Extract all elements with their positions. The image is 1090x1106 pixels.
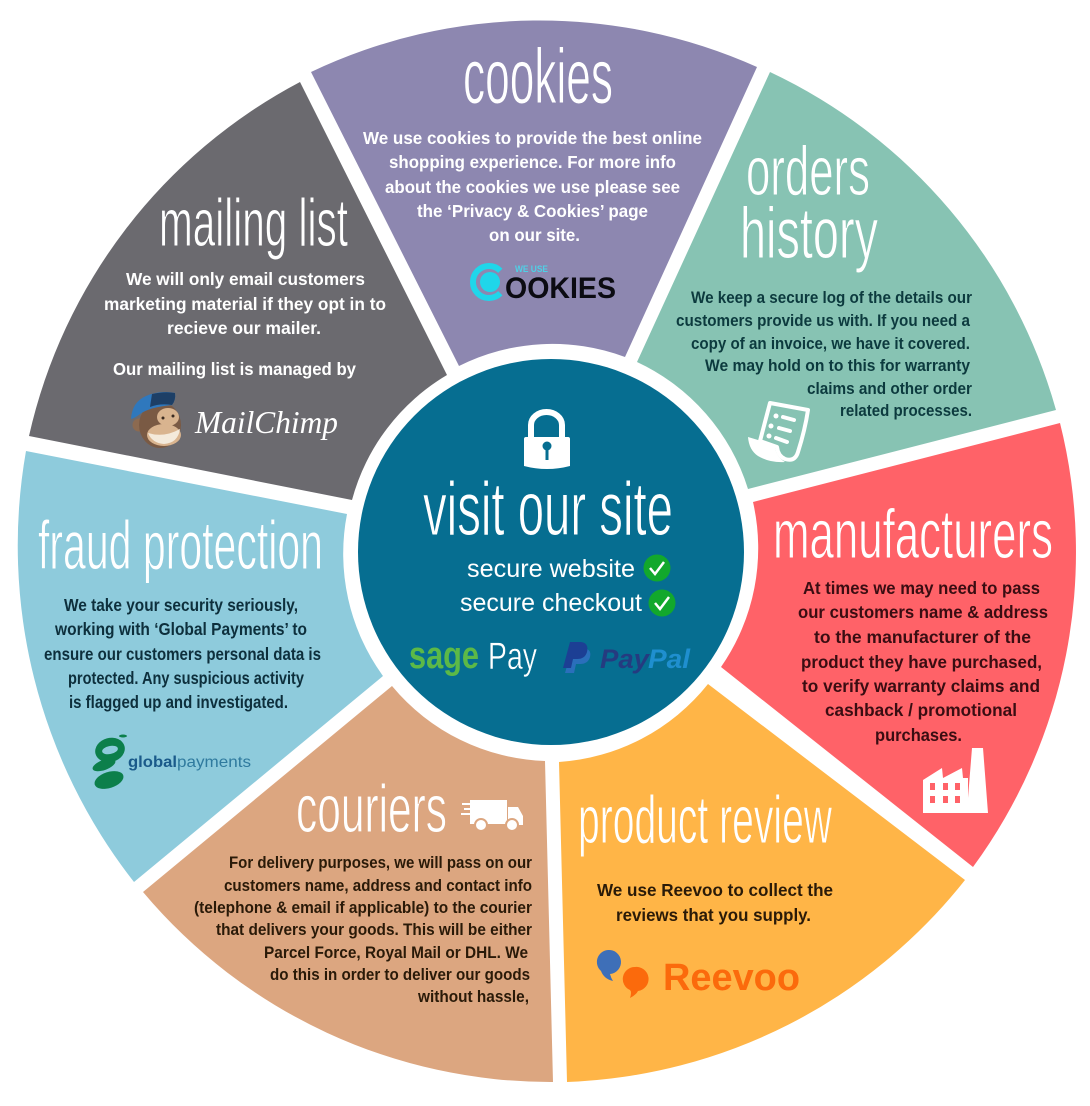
icon: check 2 <box>648 590 676 616</box>
body text: Parcel Force, Royal Mail or DHL. We <box>264 944 528 962</box>
body text: on our site. <box>489 225 580 245</box>
body text <box>363 128 702 245</box>
segment shape <box>311 20 757 366</box>
icon: delivery truck <box>461 800 523 831</box>
heading: orders history <box>740 132 878 274</box>
body text <box>597 880 833 925</box>
body text: reviews that you supply. <box>616 905 811 925</box>
body text: customers provide us with. If you need a <box>676 312 971 330</box>
body text <box>104 269 386 379</box>
body text <box>676 289 973 420</box>
body text: shopping experience. For more info <box>389 152 676 172</box>
logo: we use cookies: WE USE <box>515 264 548 274</box>
segment shape <box>637 72 1056 489</box>
body text: working with ‘Global Payments’ to <box>54 619 307 639</box>
panel: fraud protection <box>18 451 383 882</box>
heading: product review: product review <box>578 782 833 858</box>
logo: global payments: payments <box>177 754 251 771</box>
logo: Reevoo <box>597 950 800 999</box>
panel: mailing list <box>29 82 447 500</box>
icon: document scroll <box>748 403 808 462</box>
body text: marketing material if they opt in to <box>104 294 386 314</box>
body text <box>798 578 1048 745</box>
body text: For delivery purposes, we will pass on our <box>229 854 533 872</box>
body text: ensure our customers personal data is <box>44 644 321 664</box>
body text: (telephone & email if applicable) to the courier <box>194 899 533 917</box>
segment shape <box>559 684 965 1082</box>
panel: couriers <box>143 686 553 1082</box>
logo: MailChimp: MailChimp <box>194 404 338 440</box>
segment shape <box>29 82 447 500</box>
body text: We use cookies to provide the best online <box>363 128 702 148</box>
segment shape <box>18 451 383 882</box>
body text: recieve our mailer. <box>167 318 321 338</box>
body text: cashback / promotional <box>825 700 1017 720</box>
segment shape <box>721 423 1076 867</box>
body text: purchases. <box>875 725 962 745</box>
body text: We take your security seriously, <box>64 595 298 615</box>
heading: orders history: orders <box>746 132 870 210</box>
panel: visit our site <box>358 359 744 745</box>
logo: Reevoo: Reevoo <box>663 957 800 999</box>
logo: PayPal <box>563 642 691 674</box>
text: secure checkout: secure checkout <box>460 589 642 617</box>
logo: Sage Pay: sage <box>409 635 479 677</box>
icon: padlock <box>524 412 570 469</box>
logo: we use cookies: OOKIES <box>505 272 616 305</box>
logo: global payments <box>91 734 251 792</box>
icon: factory <box>923 748 988 813</box>
body text: product they have purchased, <box>801 652 1042 672</box>
heading: mailing list: mailing list <box>159 185 348 261</box>
heading: cookies: cookies <box>463 32 613 120</box>
heading: fraud protection: fraud protection <box>38 507 323 584</box>
body text: to verify warranty claims and <box>802 676 1040 696</box>
body text: the ‘Privacy & Cookies’ page <box>417 201 648 221</box>
heading: visit our site: visit our site <box>423 467 673 552</box>
body text: protected. Any suspicious activity <box>68 668 304 688</box>
body text: We may hold on to this for warranty <box>705 357 971 375</box>
body text: We use Reevoo to collect the <box>597 880 833 900</box>
heading: couriers: couriers <box>296 771 447 847</box>
logo: Sage Pay: Pay <box>488 636 537 678</box>
body text: customers name, address and contact info <box>224 877 532 895</box>
body text: do this in order to deliver our goods <box>270 966 530 984</box>
body text <box>44 595 321 712</box>
logo: Sage Pay <box>409 635 537 678</box>
logo: we use cookies <box>473 264 616 305</box>
logo: PayPal: Pal <box>648 644 691 674</box>
body text: Our mailing list is managed by <box>113 359 356 379</box>
text: secure website: secure website <box>467 555 635 583</box>
panel: orders history <box>637 72 1056 489</box>
body text: is flagged up and investigated. <box>69 692 288 712</box>
body text: We keep a secure log of the details our <box>691 289 973 307</box>
panel: manufacturers <box>721 423 1076 867</box>
body text: At times we may need to pass <box>803 578 1040 598</box>
body text: copy of an invoice, we have it covered. <box>691 335 970 353</box>
panel: cookies <box>311 20 757 366</box>
logo: global payments: global <box>128 754 177 771</box>
heading: orders history: history <box>740 194 878 274</box>
logo: PayPal: Pay <box>600 644 651 674</box>
icon: check 1 <box>644 554 670 582</box>
centre circle <box>358 359 744 745</box>
body text: about the cookies we use please see <box>385 177 680 197</box>
body text: claims and other order <box>807 380 973 398</box>
segment shape <box>143 686 553 1082</box>
body text: related processes. <box>840 402 972 420</box>
body text: We will only email customers <box>126 269 365 289</box>
body text: to the manufacturer of the <box>814 627 1031 647</box>
body text: without hassle, <box>417 988 529 1006</box>
body text <box>194 854 533 1006</box>
body text: our customers name & address <box>798 602 1048 622</box>
panel: product review <box>559 684 965 1082</box>
body text: that delivers your goods. This will be either <box>216 921 533 939</box>
logo: MailChimp <box>131 392 338 448</box>
